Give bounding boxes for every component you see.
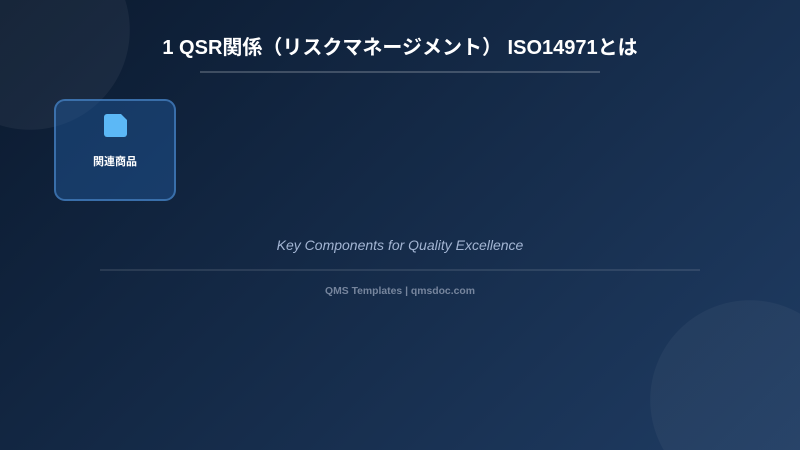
decorative circle: bottom right: [650, 300, 800, 450]
title underline: [200, 71, 600, 73]
title: 1 QSR関係（リスクマネージメント） ISO14971とは: [162, 37, 638, 59]
subtitle: Key Components for Quality Excellence: [277, 237, 523, 253]
footer text: QMS Templates | qmsdoc.com: [325, 286, 475, 297]
footer divider: [100, 269, 700, 271]
card label: 関連商品: [93, 156, 137, 168]
icon: document: [104, 114, 127, 137]
decorative circle: top left: [0, 0, 130, 130]
card: related products: [54, 99, 176, 201]
